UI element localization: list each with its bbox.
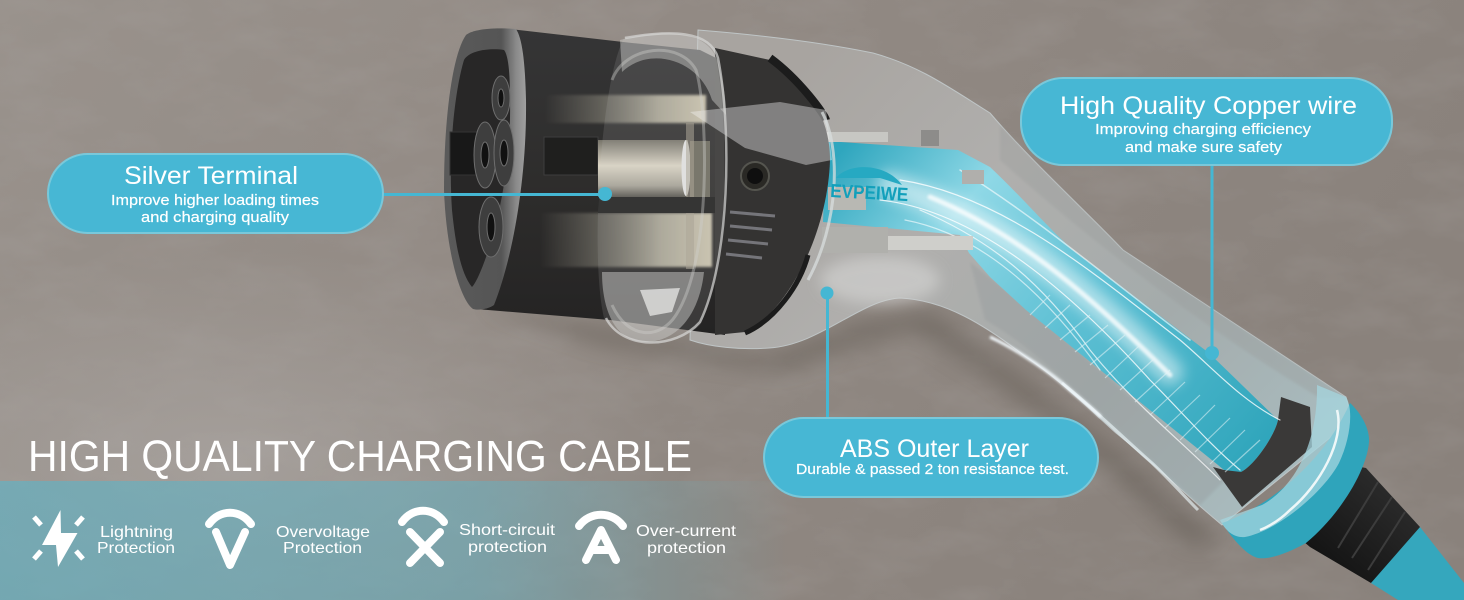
feature: Over-current protection: Over-current bbox=[636, 523, 737, 540]
callout: High Quality Copper wire: and make sure safety bbox=[1125, 140, 1283, 156]
callout: ABS Outer Layer: ABS Outer Layer bbox=[840, 435, 1029, 463]
callout: High Quality Copper wire: High Quality Copper wire bbox=[1060, 92, 1357, 120]
feature: Over-current protection: protection bbox=[647, 540, 726, 557]
callout: Silver Terminal: and charging quality bbox=[141, 210, 290, 226]
white energy wires bbox=[880, 170, 1280, 480]
transparent flange ring bbox=[598, 33, 726, 343]
hex screw bbox=[741, 162, 769, 190]
glass lower edge shine bbox=[1062, 383, 1198, 510]
transparent outer shell bbox=[690, 30, 1352, 525]
callout: Silver Terminal: Improve higher loading times bbox=[111, 193, 319, 209]
feature: Short-circuit protection: Short-circuit bbox=[459, 522, 556, 539]
callout: Silver Terminal: Silver Terminal bbox=[124, 162, 298, 190]
teal outer cable bbox=[1371, 527, 1464, 600]
icon: X with arc bbox=[402, 511, 444, 563]
brand logo EVPEIWE: EVPEIWE bbox=[830, 181, 909, 206]
white collar line bbox=[1260, 410, 1339, 530]
teal collar ring bbox=[1222, 403, 1369, 558]
charging connector illustration bbox=[444, 28, 1464, 600]
plug inner drum with ribs bbox=[715, 48, 830, 335]
lower tube mesh wall bbox=[970, 262, 1225, 505]
title: HIGH QUALITY CHARGING CABLE bbox=[28, 432, 692, 481]
icon: V with arc bbox=[209, 513, 251, 565]
plug front recess bbox=[451, 49, 510, 287]
energy glow on cable bbox=[890, 185, 1170, 372]
feature: Lightning Protection: Lightning bbox=[100, 524, 173, 541]
callout: ABS Outer Layer bbox=[764, 286, 1098, 497]
feature: Short-circuit protection: protection bbox=[468, 539, 547, 556]
lower edge sparkle bbox=[990, 337, 1101, 417]
icon: lightning bolt bbox=[34, 510, 83, 567]
square socket on face bbox=[450, 132, 478, 175]
plug front rim bbox=[444, 28, 526, 310]
brand logo EVPEIWE bbox=[830, 167, 909, 206]
connector shadow bbox=[480, 305, 1220, 545]
callout: High Quality Copper wire: Improving charging efficiency bbox=[1095, 122, 1312, 138]
feature: Lightning Protection: Protection bbox=[97, 540, 175, 557]
inner shell lip bbox=[808, 112, 834, 280]
bottom teal band bbox=[0, 481, 790, 600]
silver pins bbox=[540, 95, 716, 269]
callout: Silver Terminal bbox=[48, 154, 612, 233]
feature: Overvoltage Protection: Protection bbox=[283, 540, 362, 557]
light translucent wedge over drum bbox=[690, 102, 832, 165]
glass end cap rim bbox=[1220, 385, 1350, 537]
socket pin holes bbox=[474, 76, 514, 257]
lower shell highlight bbox=[820, 256, 940, 304]
callout: ABS Outer Layer: Durable & passed 2 ton resistance test. bbox=[796, 462, 1069, 478]
feature: Over-current protection bbox=[579, 515, 737, 560]
cable rib lines bbox=[1030, 295, 1260, 472]
icon: A with arc bbox=[579, 515, 623, 560]
dark cable end cap bbox=[1213, 397, 1312, 507]
dark plug body bbox=[476, 29, 725, 335]
feature: Short-circuit protection bbox=[402, 511, 556, 563]
callout: High Quality Copper wire bbox=[1021, 78, 1392, 360]
upper tube wall band bbox=[1000, 125, 1346, 398]
feature: Overvoltage Protection bbox=[209, 513, 370, 565]
teal inner cable bbox=[823, 141, 1278, 474]
cable strain relief bbox=[1290, 465, 1420, 583]
silver wire terminals bbox=[822, 130, 984, 253]
feature: Overvoltage Protection: Overvoltage bbox=[276, 524, 370, 541]
feature: Lightning Protection bbox=[34, 510, 175, 567]
